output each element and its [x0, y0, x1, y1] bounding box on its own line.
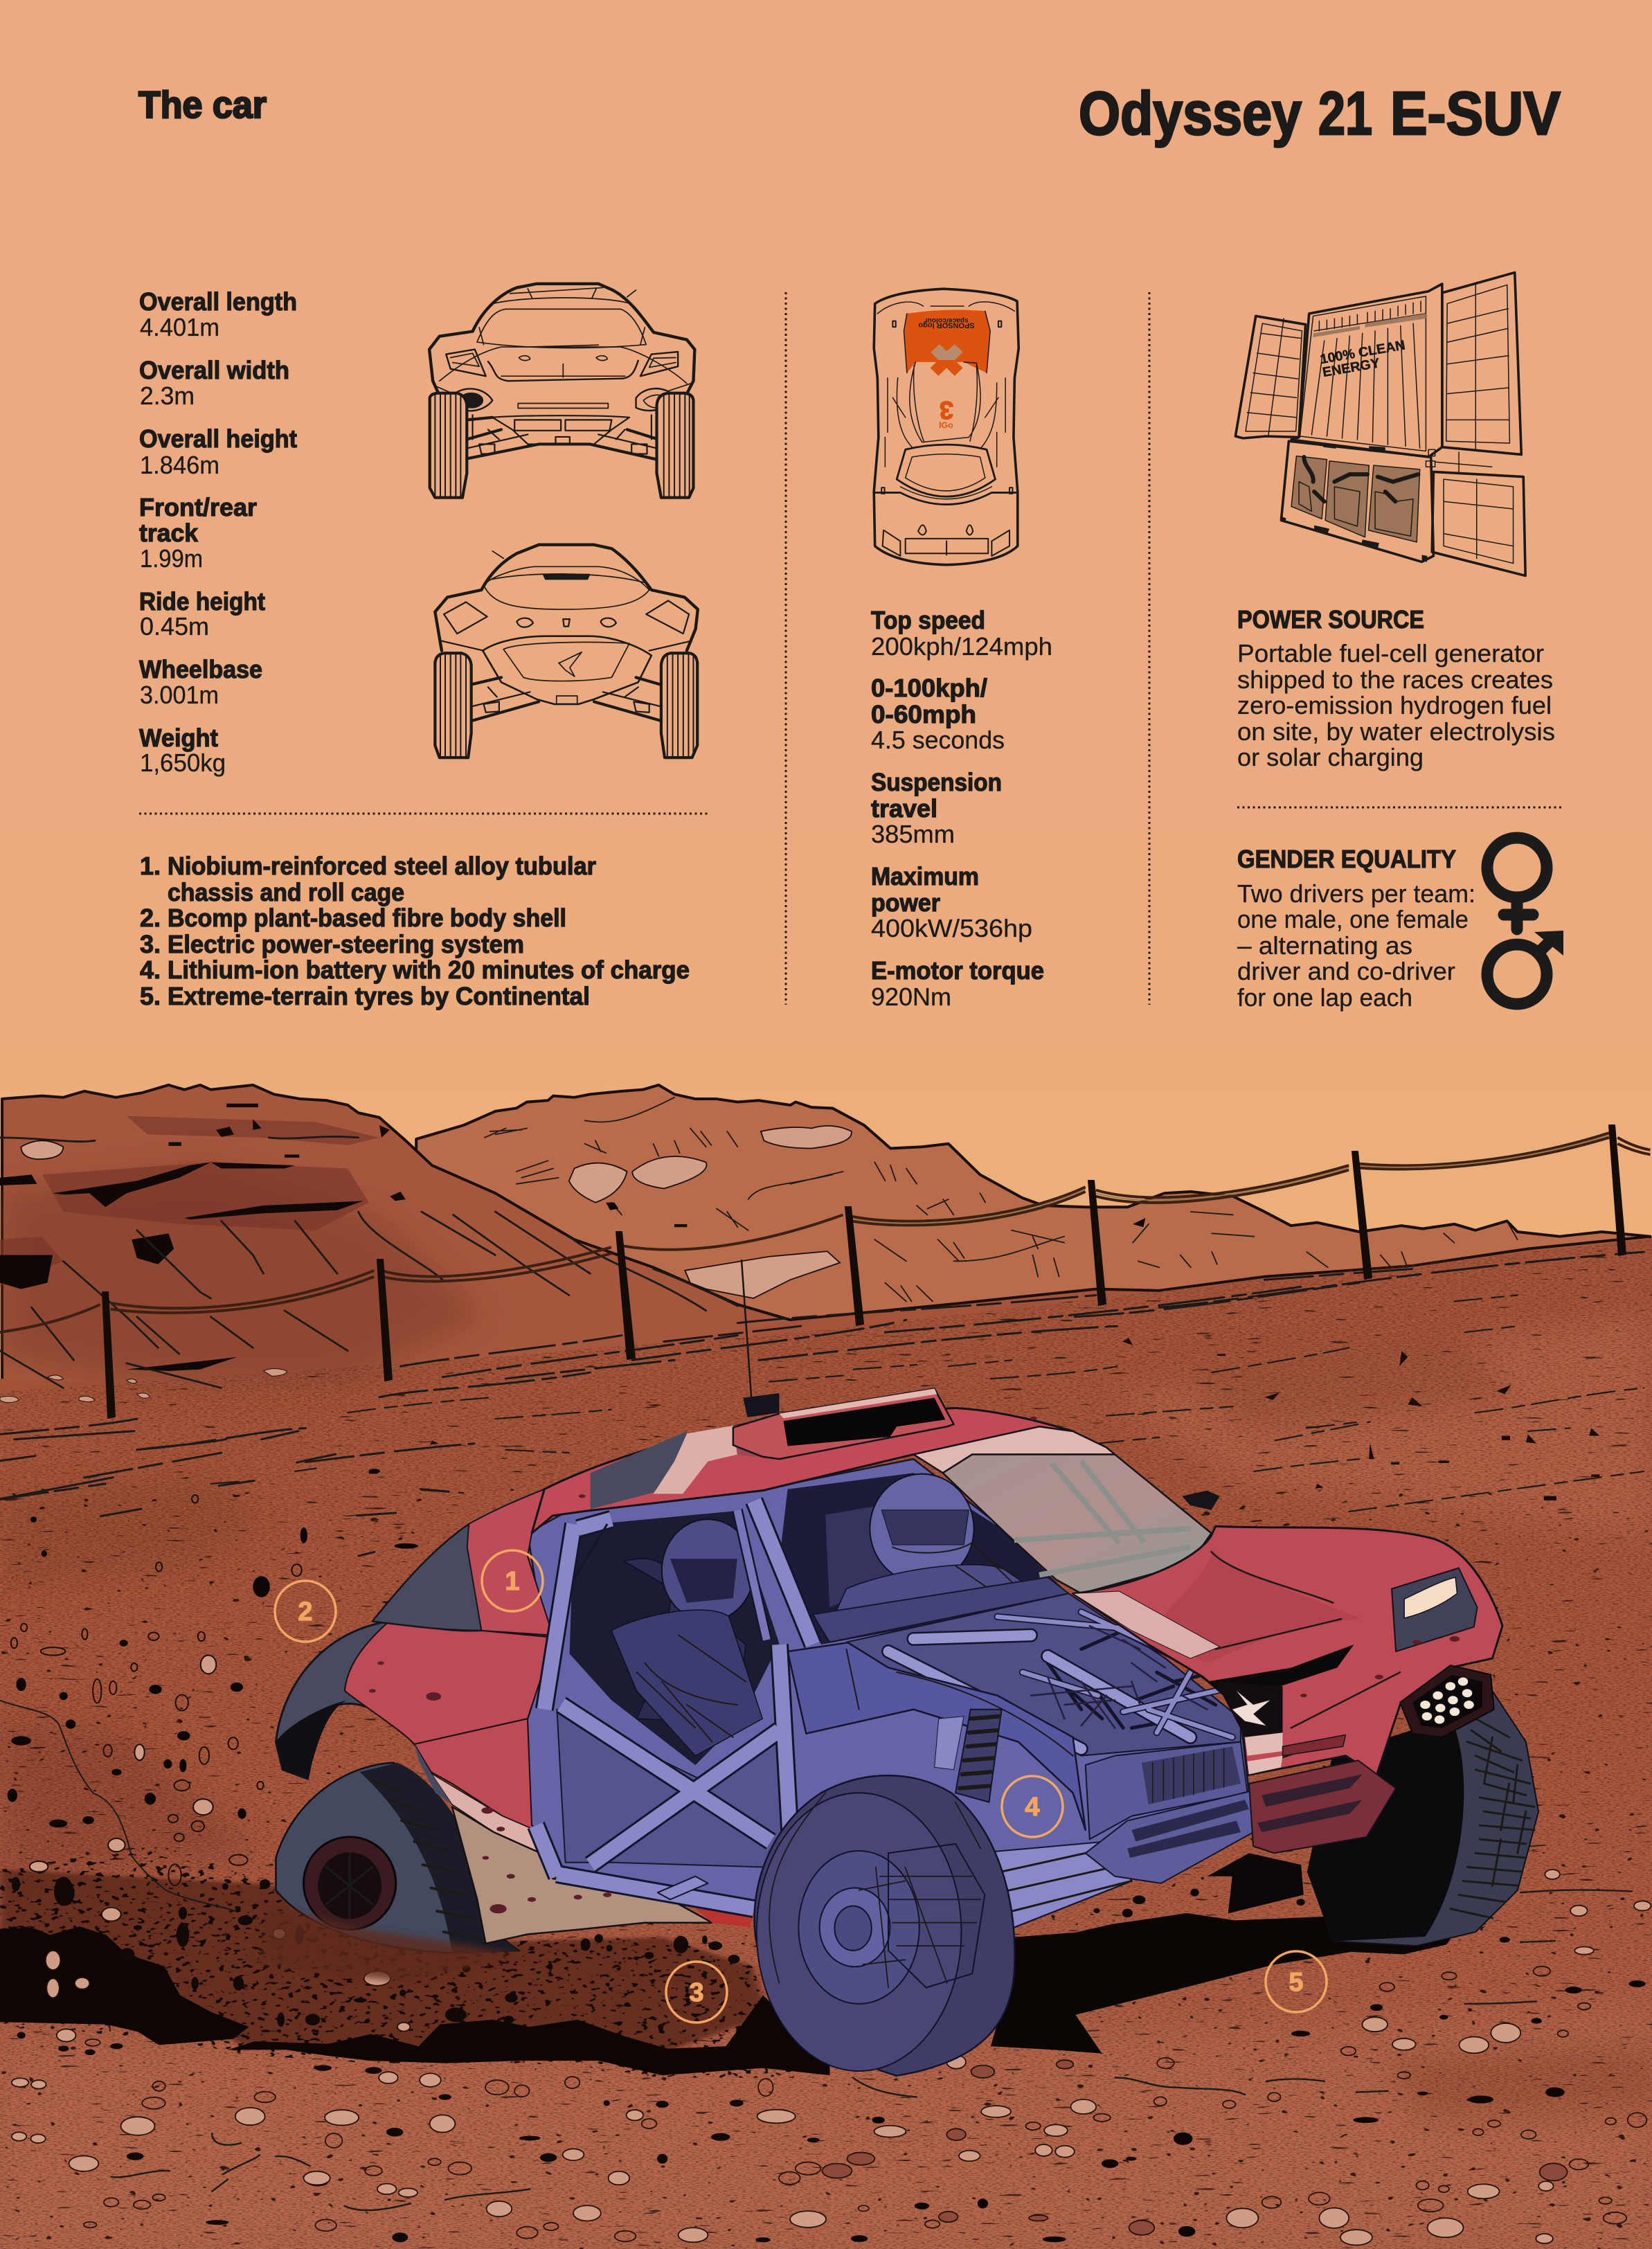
spec: suspension travel: travel	[871, 794, 937, 823]
ground streak flecks	[0, 1246, 1652, 2249]
spec: e-motor torque	[871, 956, 1044, 1011]
callout marker 5: 5	[1289, 1968, 1304, 1997]
bonnet crease	[1212, 1552, 1400, 1760]
title: The car: The car	[138, 83, 267, 126]
panel: gender equality: GENDER EQUALITY	[1237, 845, 1456, 873]
divider dotted horizontal right	[1237, 806, 1561, 809]
flying dirt speckles	[12, 1876, 820, 2242]
spec: maximum power: Maximum	[871, 862, 979, 890]
spec: weight: 1,650kg	[140, 749, 226, 777]
windscreen glass	[943, 1454, 1212, 1593]
panel: power source: or solar charging	[1237, 743, 1424, 771]
divider dotted horizontal	[139, 813, 710, 814]
dust brown band	[0, 1870, 769, 2054]
panel: gender equality: – alternating as	[1237, 931, 1412, 960]
spec: top speed	[871, 606, 1052, 661]
headlight bezel	[1392, 1568, 1478, 1651]
panel: power source: shipped to the races creates	[1237, 665, 1553, 694]
list: component key: Electric power-steering system	[168, 930, 524, 958]
spec: overall width: Overall width	[139, 356, 289, 384]
ground light and dark tones	[0, 1163, 1652, 2249]
sparse floor flecks	[0, 1489, 1652, 2249]
codriver bay dark	[779, 1473, 1073, 1645]
suspension arm lines	[980, 1849, 1131, 1918]
spec: overall height: 1.846m	[140, 451, 219, 479]
spec: weight	[139, 724, 226, 777]
list: component key: 2.	[140, 904, 161, 932]
nose X logo	[1216, 1682, 1283, 1737]
splitter vents	[1127, 1800, 1249, 1858]
spec: overall height: Overall height	[139, 424, 297, 453]
panel: power source: zero-emission hydrogen fuel	[1237, 691, 1552, 719]
pale nose stripe	[1073, 1591, 1220, 1658]
title: Odyssey 21 E-SUV: Odyssey	[1079, 79, 1302, 147]
rear wheel dust overlay	[259, 1904, 523, 1983]
ground base	[0, 1238, 1652, 2249]
dust crack line	[0, 1701, 235, 1911]
bumper vents	[1257, 1774, 1363, 1832]
upper rear quarter dark	[372, 1524, 481, 1631]
lower red panel	[414, 1719, 540, 1832]
spec: overall width	[139, 356, 289, 410]
list: component key: 1.	[140, 852, 161, 880]
race number: 3	[940, 396, 953, 424]
fence posts	[102, 1125, 1626, 1418]
list: component key: Niobium-reinforced steel alloy tubular	[168, 852, 596, 880]
maroon bumper	[1249, 1760, 1396, 1853]
black rut shadow band	[228, 1996, 829, 2075]
spec: overall length	[139, 287, 297, 341]
panel: gender equality: one male, one female	[1237, 905, 1469, 933]
divider dotted vertical 1	[785, 292, 787, 1005]
ground grain	[0, 1239, 1652, 2249]
icon: female symbol	[1487, 838, 1547, 929]
spec: weight: Weight	[139, 724, 218, 752]
blueprint: car front view	[429, 284, 694, 498]
blueprint: car rear view	[435, 545, 698, 758]
scene: desert landscape	[0, 1085, 1652, 2249]
driver bay dark	[570, 1511, 779, 1765]
panel: gender equality	[1237, 845, 1475, 1012]
nose	[1073, 1526, 1502, 1775]
radiator	[1086, 1742, 1248, 1839]
spec: front/rear track: Front/rear	[139, 493, 257, 521]
spec: suspension travel: 385mm	[871, 820, 955, 848]
blueprint: hydrogen container	[1235, 273, 1525, 575]
rear seat & driver	[611, 1519, 762, 1756]
rear wheel	[276, 1763, 519, 1953]
pale nose lower stripes	[1245, 1732, 1283, 1774]
windshield top band	[913, 1426, 1115, 1473]
rear fender red	[345, 1621, 555, 1744]
arch panel edge	[846, 1649, 1073, 1756]
container text	[1319, 338, 1409, 380]
antenna	[742, 1260, 779, 1417]
callout marker 4	[1002, 1776, 1063, 1837]
list: component key: Extreme-terrain tyres by Continental	[168, 982, 590, 1010]
spec: maximum power: 400kW/536hp	[871, 914, 1032, 942]
spec: top speed: Top speed	[871, 606, 985, 634]
lower suspension arms	[976, 1842, 1131, 1927]
spec: wheelbase: 3.001m	[140, 681, 219, 709]
panel: power source: POWER SOURCE	[1237, 605, 1424, 634]
title: Odyssey 21 E-SUV	[1079, 79, 1561, 147]
headlight lens	[1404, 1577, 1457, 1618]
callout marker 1: 1	[505, 1567, 520, 1596]
roof	[532, 1408, 1073, 1533]
nose shading	[1149, 1547, 1359, 1663]
callout marker 3: 3	[689, 1978, 704, 2007]
door lower panel	[557, 1710, 792, 1867]
spec: overall height	[139, 424, 297, 479]
spec: overall width: 2.3m	[140, 382, 195, 410]
callout marker 5	[1266, 1951, 1327, 2012]
hillside shading	[0, 1097, 1518, 1403]
spec: front/rear track: track	[139, 519, 199, 547]
red nose vent	[1283, 1735, 1345, 1756]
dash ledge	[813, 1577, 1069, 1642]
list: component key: 5.	[140, 982, 161, 1010]
logo mark: IGo	[939, 420, 953, 430]
panel: gender equality: driver and co-driver	[1237, 957, 1455, 985]
engine bay	[846, 1593, 1241, 1756]
callout marker 2: 2	[298, 1597, 313, 1627]
scene: dust and shadows on ground	[0, 1431, 1652, 2249]
black rut shadow left	[0, 1926, 249, 2045]
black chips right	[851, 1889, 1646, 2242]
spec: ride height: 0.45m	[140, 612, 209, 640]
spec: e-motor torque: E-motor torque	[871, 956, 1044, 985]
spec: suspension travel: Suspension	[871, 768, 1002, 796]
list: component key: Bcomp plant-based fibre body shell	[168, 904, 566, 932]
panel: gender equality: Two drivers per team:	[1237, 879, 1475, 908]
windscreen interior bars	[1014, 1461, 1190, 1575]
list: component key: 4.	[140, 956, 161, 984]
cage bars	[536, 1500, 813, 1909]
illustration: rally car cutaway	[259, 1260, 1538, 2076]
list: component key: chassis and roll cage	[168, 878, 404, 906]
panel: power source: on site, by water electrolysis	[1237, 717, 1555, 746]
spec: acceleration	[871, 674, 1005, 754]
panel: dimensions list	[139, 287, 297, 777]
container text: ENERGY	[1321, 356, 1381, 380]
black mudflap	[1207, 1853, 1304, 1913]
spec: wheelbase: Wheelbase	[139, 655, 262, 683]
spec: overall length: Overall length	[139, 287, 297, 316]
sill red sliver	[695, 1909, 754, 1927]
panel: gender equality: for one lap each	[1237, 983, 1412, 1012]
icon: male symbol	[1487, 931, 1563, 1004]
front left hill	[2, 1085, 1650, 1440]
upper rear quarter red	[467, 1489, 553, 1636]
body rivets	[369, 1417, 1460, 1913]
spec: front/rear track: 1.99m	[140, 544, 203, 573]
spec: ride height: Ride height	[139, 587, 265, 616]
blueprint: car top view	[874, 289, 1018, 565]
list: component key: 3.	[140, 930, 161, 958]
base cage fill	[519, 1459, 1249, 1927]
front wheel	[755, 1775, 1015, 2076]
dark mid arch	[414, 1744, 452, 1804]
panel: power source: Portable fuel-cell generator	[1237, 639, 1544, 667]
panel: power source	[1237, 605, 1555, 771]
mirror	[1182, 1491, 1220, 1510]
wheel arch blue panel	[788, 1642, 1086, 1830]
sponsor text: SPONSOR logo	[918, 321, 975, 329]
front splitter	[1086, 1791, 1257, 1883]
fender black lip	[276, 1700, 347, 1779]
callout marker 2	[275, 1581, 336, 1642]
pale stones right	[823, 1870, 1651, 2245]
spec: top speed: 200kph/124mph	[871, 632, 1052, 661]
panel: performance specs	[871, 606, 1052, 1011]
field furrows and scratches	[0, 1252, 1644, 1512]
title: Odyssey 21 E-SUV: 21	[1318, 79, 1372, 147]
grille slit	[1207, 1645, 1354, 1700]
pale stripe lower	[431, 1773, 543, 1854]
rear fender dark	[276, 1621, 553, 1779]
spec: maximum power	[871, 862, 1032, 942]
pale stones left	[12, 1908, 826, 2242]
black shadow below car	[991, 1870, 1457, 2054]
flying debris left of car	[0, 1431, 449, 1921]
spec: suspension travel	[871, 768, 1002, 848]
callout marker 3	[666, 1962, 727, 2023]
fence ropes	[0, 1133, 1650, 1332]
list: component key	[140, 852, 690, 1010]
roof scoop	[733, 1388, 954, 1459]
sponsor text	[918, 316, 975, 329]
list: component key: Lithium-ion battery with 20 minutes of charge	[168, 956, 690, 984]
spec: overall length: 4.401m	[140, 313, 219, 341]
front driver	[825, 1474, 1039, 1626]
foglight	[1400, 1665, 1494, 1737]
callout marker 4: 4	[1025, 1793, 1040, 1822]
spec: acceleration: 4.5 seconds	[871, 726, 1005, 754]
title: Odyssey 21 E-SUV: E-SUV	[1390, 79, 1561, 147]
spec: maximum power: power	[871, 888, 940, 917]
tan sill	[452, 1807, 712, 1944]
spec: e-motor torque: 920Nm	[871, 983, 951, 1011]
spec: ride height	[139, 587, 265, 640]
container text: 100% CLEAN	[1319, 338, 1406, 367]
spec: front/rear track	[139, 493, 257, 573]
back hill	[416, 1085, 1650, 1410]
rocker step	[658, 1876, 708, 1899]
divider dotted vertical 2	[1148, 292, 1151, 1005]
engine pipes and bars	[888, 1612, 1241, 1749]
worm cracks	[853, 1890, 1632, 2097]
far front wheel	[1308, 1691, 1538, 1946]
spec: acceleration: 0-60mph	[871, 700, 976, 728]
dense dust flecks	[0, 1662, 900, 2147]
sponsor text: space/colour	[924, 316, 969, 324]
roof stripes	[591, 1431, 687, 1509]
spec: acceleration: 0-100kph/	[871, 674, 987, 702]
shock absorber	[935, 1710, 1002, 1802]
callout marker 1	[482, 1550, 543, 1611]
spec: wheelbase	[139, 655, 262, 709]
